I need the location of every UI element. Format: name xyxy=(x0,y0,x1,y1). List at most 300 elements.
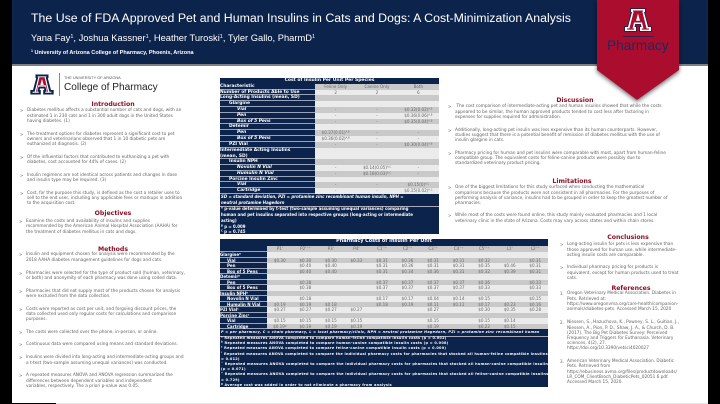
table rows: - xyxy=(418,171,419,176)
table rows: 2 xyxy=(376,90,378,95)
table rows: $0.31 xyxy=(427,263,439,268)
table rows: $0.22 xyxy=(478,324,490,329)
table rows: $0.33 xyxy=(529,280,541,285)
text: reference 3: https://ebusiness.avma.org/files/productdownloads/ xyxy=(567,370,677,374)
panel: college logo xyxy=(30,73,158,96)
title: The Use of FDA Approved Pet and Human Insulins in Cats and Dogs: A Cost-Minimization Analysis xyxy=(31,11,571,25)
table footnotes xyxy=(220,329,548,387)
table rows: $0.15(0.02)A,C xyxy=(404,188,432,193)
table rows: Cartridge xyxy=(237,188,260,193)
table rows: $0.36 xyxy=(402,263,413,268)
heading: objectives: Objectives xyxy=(95,210,131,217)
text: methods bullet 3 xyxy=(19,288,180,299)
table rows: Pen xyxy=(237,113,246,118)
text: methods bullet 8: differences between dependent variables and independent xyxy=(26,379,152,384)
table rows: Humulin N Vial xyxy=(227,302,260,307)
table rows: - xyxy=(335,165,336,170)
table rows: $0.37 xyxy=(453,285,464,290)
heading: introduction: Introduction xyxy=(91,100,135,108)
text: > xyxy=(19,219,22,224)
table rows: PZI Vial xyxy=(229,142,248,147)
text: introduction bullet 2 xyxy=(20,132,175,147)
text: introduction bullet 1: having diabetes. (1) xyxy=(27,119,70,124)
table title xyxy=(220,78,439,84)
table rows: $0.15 xyxy=(478,296,490,301)
table rows: $0.37 xyxy=(376,280,388,285)
table rows: $0.19 xyxy=(274,302,286,307)
text: discussion bullet 1: expenses for supplies required for administration. xyxy=(455,115,561,120)
table footnotes: a Repeated measures ANOVA completed to compare human-feline compatible insulin costs (p = 0.002) xyxy=(221,336,447,340)
heading: methods: Methods xyxy=(98,246,128,253)
table rows: - xyxy=(418,130,419,135)
table rows: $0.15 xyxy=(351,318,362,323)
text: methods bullet 8 xyxy=(19,372,173,389)
table rows: $0.37 xyxy=(427,280,439,285)
table rows: $0.31 xyxy=(529,269,541,274)
table rows: $0.19 xyxy=(351,324,362,329)
text: introduction bullet 2: The treatment options for diabetes represent a significant cost to pet xyxy=(27,132,175,137)
text: methods bullet 2 xyxy=(19,270,185,281)
table rows: $0.27 xyxy=(427,307,439,312)
table rows: P4* xyxy=(353,246,360,251)
text: 1. xyxy=(560,291,564,296)
text: limitations bullet 2 xyxy=(448,212,657,224)
text: limitations bullet 1 xyxy=(448,184,668,206)
table rows: Insulin NPHb xyxy=(220,291,248,296)
text: > xyxy=(448,128,451,133)
text: methods bullet 1: 2018 AAHA diabetes management guidelines for dogs and cats. xyxy=(26,258,162,263)
text: reference 3: Pets. Retrieved from xyxy=(567,364,610,369)
text: methods bullet 6: Continuous data were compared using means and standard deviations. xyxy=(26,342,178,347)
table rows: $0.19 xyxy=(325,324,337,329)
table rows: $0.15 xyxy=(325,318,337,323)
table rows: P1* xyxy=(277,246,283,251)
text: 3. xyxy=(560,359,564,364)
table rows: $0.46 xyxy=(504,263,516,268)
heading: discussion: Discussion xyxy=(556,96,594,104)
table footnotes: = 0.012) xyxy=(221,357,240,361)
text: limitations bullet 1: comparisons because the products were not consistent in all pharmacies. For the purposes of xyxy=(455,191,654,196)
university name: THE UNIVERSITY OF ARIZONA xyxy=(64,75,121,80)
table rows: Pen xyxy=(227,263,236,268)
table rows: $0.35(0.04)A,B xyxy=(404,119,432,124)
text: > xyxy=(448,185,451,190)
affiliation: 1 University of Arizona College of Pharmacy, Phoenix, Arizona xyxy=(31,49,194,56)
text: discussion bullet 1: The cost comparison of intermediate-acting pet and human insulins showed that while the costs xyxy=(456,104,662,109)
table rows: $0.19 xyxy=(427,324,439,329)
table: pharmacy costs of insulin per unit xyxy=(220,239,548,387)
table: cost of insulin per unit per species xyxy=(220,78,439,234)
panel: header band xyxy=(12,0,708,66)
text: methods bullet 8: A repeated measures ANOVA and ANOVA regression summarized the xyxy=(26,373,173,378)
table rows: $0.19g xyxy=(273,324,286,329)
text: > xyxy=(19,271,22,276)
table rows: $0.18 xyxy=(299,296,311,301)
text: discussion bullet 2: Additionally, long-acting pet insulin was less expensive than its human counterparts. However, xyxy=(455,128,657,133)
table rows: $0.32 xyxy=(478,258,490,263)
text: introduction bullet 3: diabetes, cost accounted for 44% of cases. (2) xyxy=(27,160,126,165)
table rows: - xyxy=(335,113,336,118)
table rows: $0.30 xyxy=(299,258,311,263)
text: reference 2: Frequency and Triggers for Euthanasia. Veterinary xyxy=(567,336,673,341)
table rows: Box of 5 Pens xyxy=(227,269,258,274)
table rows: Porcine Zincc xyxy=(220,313,249,318)
table rows: Box of 5 Pens xyxy=(227,285,258,290)
table rows: Pen xyxy=(237,130,246,135)
text: discussion bullet 3: compatible group. The equivalent costs for feline-canine products were possibly due to xyxy=(455,156,640,161)
table rows: $0.18 xyxy=(325,302,337,307)
text: reference 2: https://doi.org/10.3390/vetsci4020027 xyxy=(567,346,649,351)
table rows: 2 xyxy=(334,90,337,95)
table rows: Intermediate Acting Insulins xyxy=(220,148,290,153)
text: > xyxy=(448,213,451,218)
table rows: Glarginea xyxy=(220,252,241,257)
table rows: - xyxy=(335,188,336,193)
text: conclusions bullet 2: equivalent, except for human products used to treat xyxy=(567,271,678,276)
text: introduction bullet 3: Of the influential factors that contributed to euthanizing a pet with xyxy=(27,155,169,160)
text: reference 2 xyxy=(560,320,679,351)
text: reference 1 xyxy=(560,290,678,312)
table rows: C3^+ xyxy=(428,246,438,251)
text: introduction bullet 3 xyxy=(20,154,169,165)
text: conclusions bullet 2: cats. xyxy=(567,276,577,281)
table rows: $0.36(0.02)A,B xyxy=(322,136,350,141)
icon: block A logo xyxy=(30,74,54,94)
table rows: $0.35 xyxy=(478,263,490,268)
table footnotes: P = per pharmacy, C = chain pharmacy, L = local pharmacy/clinic, NPH = neutral protamine Hagedorn, PZI = protamine zinc recombinant human xyxy=(221,330,540,334)
text: > xyxy=(560,242,563,247)
table rows: Cartridge xyxy=(227,324,248,329)
text: methods bullet 7: a t-test (two-sample assuming unequal variances) was conducted. xyxy=(26,361,168,366)
text: conclusions bullet 2 xyxy=(560,264,678,281)
table rows: - xyxy=(335,107,336,112)
text: introduction bullet 1: Diabetes mellitus affects a substantial number of cats and dogs, with an xyxy=(27,108,181,113)
text: > xyxy=(19,330,22,335)
table footnotes: (p = 0.071) xyxy=(221,367,246,371)
table rows: $0.38 xyxy=(299,280,311,285)
table rows: - xyxy=(335,182,336,187)
table rows: $0.34 xyxy=(402,269,413,274)
text: > xyxy=(19,342,22,347)
table title xyxy=(220,239,548,246)
table rows: $0.28 xyxy=(529,307,541,312)
text: conclusions bullet 1 xyxy=(560,242,677,258)
table rows: $0.16 xyxy=(529,302,541,307)
table rows: $0.36(0.06)A,B xyxy=(404,113,432,118)
text: discussion bullet 3: standardized veterinary product pricing. xyxy=(455,161,541,166)
text: objectives bullet xyxy=(19,218,178,234)
table rows: Number of Products Able to Use xyxy=(220,90,300,95)
icon: block A logo xyxy=(624,8,652,32)
table rows: Vial xyxy=(227,258,235,263)
table rows: Detemir xyxy=(229,124,249,129)
college name: College of Pharmacy xyxy=(64,82,158,93)
text: discussion bullet 3 xyxy=(448,150,666,166)
text: discussion bullet 3: Pharmacy pricing for human and pet insulins were comparable with most, apart from human-feline xyxy=(455,151,666,156)
heading: conclusions: Conclusions xyxy=(607,234,649,241)
table rows: $0.31 xyxy=(453,258,464,263)
table rows: Novolin N Vial xyxy=(227,296,259,301)
table rows: $0.15 xyxy=(427,318,439,323)
table rows: $0.14(0.05)A,C xyxy=(363,165,391,170)
table rows: $0.31 xyxy=(529,263,541,268)
text: methods bullet 4: data collected used only regular costs for calculations and comparison xyxy=(26,312,176,317)
table rows: Feline Only xyxy=(324,84,347,89)
text: conclusions bullet 1: Long-acting insulin for pets is less expensive than xyxy=(567,242,673,247)
table footnotes: A p-value determined by t-test (two-sample assuming unequal variances) comparing xyxy=(221,206,408,211)
table rows: Long-Acting Insulins (mean, SD) xyxy=(220,95,300,100)
text: methods bullet 7 xyxy=(19,354,184,366)
text: > xyxy=(20,191,23,196)
table rows: - xyxy=(376,136,378,141)
text: methods bullet 2: or both) and anonymity of each pharmacy was done using coded data. xyxy=(26,276,177,281)
table rows: $0.31 xyxy=(427,258,439,263)
table rows: - xyxy=(376,119,378,124)
divider xyxy=(58,73,60,96)
table rows: - xyxy=(418,136,419,141)
text: limitations bullet 1: One of the biggest limitations for this study surfaced when conducting the mathematical xyxy=(455,185,644,190)
table rows: PZI Vialc xyxy=(220,307,239,312)
table rows: $0.15(0)A,C xyxy=(408,182,429,187)
table rows: $0.27 xyxy=(299,307,311,312)
table rows: Box of 5 Pens xyxy=(237,119,271,124)
text: introduction bullet 5 xyxy=(20,190,182,206)
text: methods bullet 1 xyxy=(19,252,175,263)
table rows: P3* xyxy=(328,246,334,251)
text: limitations bullet 2: veterinary clinic in the state of Arizona. Costs may vary across states and within chain stores. xyxy=(455,219,655,224)
divider rule xyxy=(623,35,654,37)
text: methods bullet 5: The costs were collected over the phone, in-person, or online. xyxy=(26,330,158,335)
table rows: $0.37(0.01)A,B xyxy=(322,130,350,135)
table rows: $0.15 xyxy=(274,318,286,323)
text: > xyxy=(20,108,23,113)
table rows: Vial xyxy=(227,318,235,323)
text: reference 1: Oregon Veterinary Medical Association. Diabetes in xyxy=(567,291,676,296)
table rows: Box of 5 Pens xyxy=(237,136,271,141)
table rows: $0.23 xyxy=(504,302,516,307)
table rows: $0.31 xyxy=(376,258,388,263)
table rows: $0.31 xyxy=(453,269,464,274)
table rows: $0.37 xyxy=(453,280,464,285)
table rows: $0.30 xyxy=(478,307,490,312)
text: conclusions bullet 2: Individual pharmacy pricing for products is xyxy=(567,265,658,270)
table rows: Insulin NPH xyxy=(229,159,258,164)
text: > xyxy=(19,289,22,294)
table rows: $0.38 xyxy=(299,285,311,290)
table rows: $0.33 xyxy=(351,258,362,263)
table rows: $0.30 xyxy=(325,258,337,263)
table rows: $0.04 xyxy=(427,296,439,301)
table footnotes: * Repeated measures ANOVA completed to compare the individual pharmacy costs for pharmacies that stocked all human-feline compatible insulins (p xyxy=(221,351,548,356)
table rows: $0.37 xyxy=(376,285,388,290)
text: introduction bullet 1 xyxy=(20,108,181,124)
table footnotes: SD = standard deviation, PZI = protamine zinc recombinant human insulin, NPH = xyxy=(221,194,404,199)
text: limitations bullet 2: While most of the costs were found online, this study mainly evaluated pharmacies and 1 local xyxy=(455,213,657,218)
table rows: $0.40 xyxy=(325,269,337,274)
table rows: $0.11 xyxy=(453,302,464,307)
heading: limitations: Limitations xyxy=(552,178,592,185)
text: objectives bullet: Examine the costs and availability of insulins and supplies xyxy=(26,219,150,224)
table rows: $0.27 xyxy=(325,307,337,312)
table rows: $0.15 xyxy=(478,318,490,323)
authors: Yana Fay1, Joshua Kassner1, Heather Turoski1, Tyler Gallo, PharmD1 xyxy=(31,33,315,43)
text: reference 1: Pets. Retrieved at: xyxy=(567,297,606,302)
text: introduction bullet 5: to the acquisition cost. xyxy=(27,201,76,206)
table rows: $0.15 xyxy=(504,324,516,329)
table rows: $0.19 xyxy=(299,324,311,329)
table rows: $0.30(0.04)A,B xyxy=(404,142,432,147)
table rows: P2*^+ xyxy=(300,246,310,251)
table rows: $0.27 xyxy=(351,307,362,312)
table rows: - xyxy=(335,119,336,124)
text: reference 1: animals/diabetes-pets. Accessed March 15, 2020 xyxy=(567,307,671,312)
ribbon shape xyxy=(594,0,682,104)
table rows: Glargine xyxy=(229,101,250,106)
text: discussion bullet 2: insulin glargine in cats. xyxy=(455,138,504,143)
text: introduction bullet 2: euthanized at diagnosis. (2) xyxy=(27,142,86,147)
table rows: $0.27 xyxy=(274,307,286,312)
table rows: Novolin N Vial xyxy=(237,165,272,170)
panel: pharmacy ribbon xyxy=(594,0,682,104)
table rows: C4^+ xyxy=(454,246,463,251)
table footnotes: ^ Repeated measures ANOVA completed to compare the individual pharmacy costs for pharmacies that stocked all human-canine compatible insulins xyxy=(221,362,548,366)
table rows: - xyxy=(376,113,378,118)
table footnotes xyxy=(220,194,439,234)
table rows: $0.40 xyxy=(325,263,337,268)
text: > xyxy=(19,252,22,257)
table rows: Humulin N Vial xyxy=(237,171,274,176)
text: > xyxy=(20,173,23,178)
table rows: - xyxy=(376,182,378,187)
table rows: $0.15 xyxy=(529,296,541,301)
text: limitations bullet 1: performing analysis of variance, insulins had to be grouped in order to keep the greatest number of xyxy=(455,196,668,201)
text: reference 2: (2017). The Big Pet Diabetes Survey: Perceived xyxy=(567,331,667,336)
text: limitations bullet 1: pharmacies. xyxy=(455,201,481,206)
text: reference 3: American Veterinary Medical Association. Diabetic xyxy=(567,359,674,364)
table rows: $0.37 xyxy=(427,285,439,290)
text: methods bullet 8: variables, respectively. The a priori p-value was 0.05. xyxy=(26,384,139,389)
text: reference 3: Accessed March 15, 2020. xyxy=(567,380,623,385)
table rows: $0.36 xyxy=(427,269,439,274)
table rows: Detemira xyxy=(220,274,240,279)
table footnotes: b Repeated measures ANOVA completed to compare human-canine compatible insulin costs (p = 0.008) xyxy=(221,341,449,345)
table rows: - xyxy=(376,188,378,193)
table rows: $0.36 xyxy=(402,258,413,263)
text: methods bullet 7: Insulins were divided into long-acting and intermediate-acting groups and xyxy=(26,355,184,360)
table rows: - xyxy=(335,171,336,176)
table rows: $0.40 xyxy=(299,263,311,268)
text: methods bullet 3: were excluded from the data collection. xyxy=(26,294,110,299)
text: methods bullet 3: Pharmacies that did not supply most of the products chosen for analysis xyxy=(26,289,180,294)
text: reference 3 xyxy=(560,358,677,385)
text: methods bullet 4: purposes. xyxy=(26,317,47,322)
text: reference 3: LR_COM_ClientBroch_DiabeticPets_02051 6.pdf. xyxy=(567,375,669,380)
table rows: $0.17 xyxy=(478,302,490,307)
text: introduction bullet 4 xyxy=(20,172,177,183)
table rows: Both xyxy=(414,84,423,89)
text: > xyxy=(19,373,22,378)
table rows: Vial xyxy=(237,182,246,187)
text: objectives bullet: the treatment of diabetes mellitus in cats and dogs. xyxy=(26,230,137,234)
text: > xyxy=(20,132,23,137)
text: objectives bullet: recommended by the American Animal Hospital Association (AAHA) for xyxy=(26,224,177,229)
text: discussion bullet 2 xyxy=(448,128,660,143)
text: discussion bullet 1: appeared to be similar, the human approved products tended to cost less after factoring in xyxy=(455,110,649,115)
table rows xyxy=(220,246,548,329)
text: discussion bullet 1 xyxy=(448,104,662,120)
table rows: (mean, SD) xyxy=(220,154,248,159)
table rows: - xyxy=(376,130,378,135)
table rows: $0.31 xyxy=(376,263,388,268)
table footnotes: acting) xyxy=(221,218,237,223)
table rows: $0.37 xyxy=(402,285,413,290)
table rows: L1* xyxy=(507,246,513,251)
table footnotes: + Repeated measures ANOVA completed to compare the individual pharmacy costs for pharmacies that stocked all feline-canine compatible insulins (p xyxy=(221,372,548,376)
table rows: C5*^+ xyxy=(479,246,489,251)
table rows: Pen xyxy=(227,280,236,285)
text: reference 2: sciences, 4(2), 27. xyxy=(567,341,606,346)
table rows: C2^+ xyxy=(403,246,412,251)
table rows: $0.17 xyxy=(376,296,388,301)
heading: references: References xyxy=(611,285,651,292)
text: introduction bullet 5: sell to the end user, including any applicable fees or markups in addition xyxy=(27,196,182,201)
table rows: C1^+ xyxy=(377,246,387,251)
bottom edge xyxy=(56,403,708,404)
table rows: $0.37 xyxy=(402,280,413,285)
table rows: $0.17 xyxy=(402,296,413,301)
table rows: - xyxy=(376,107,378,112)
table rows: $0.32 xyxy=(478,269,490,274)
text: > xyxy=(20,155,23,160)
text: introduction bullet 4: and insulin type may be required. (3) xyxy=(27,178,106,183)
text: 2. xyxy=(560,320,564,325)
table rows: $0.32(0.02)A,B xyxy=(404,107,432,112)
table rows: $0.35 xyxy=(504,307,516,312)
text: introduction bullet 4: Insulin regimens are not identical across patients and changes in dose xyxy=(27,173,177,178)
text: introduction bullet 5: Cost, for the purpose this study, is defined as the cost a retailer uses to xyxy=(27,191,180,196)
table rows: $0.19 xyxy=(299,302,311,307)
table rows: L2^+ xyxy=(531,246,540,251)
table rows: $0.30 xyxy=(274,258,286,263)
table rows: $0.40 xyxy=(299,269,311,274)
text: methods bullet 2: Pharmacies were selected for the type of product sold (human, veterinary, xyxy=(26,271,185,276)
table rows: Characteristic xyxy=(220,84,255,89)
table rows: $0.31 xyxy=(376,269,388,274)
table title: Cost of Insulin Per Unit Per Species xyxy=(285,78,374,82)
text: discussion bullet 2: studies suggest that there is a potential benefit of remission of diabetes mellitus with the use of xyxy=(455,133,660,138)
table rows: - xyxy=(376,142,378,147)
table rows: $0.39 xyxy=(504,269,516,274)
table footnotes: g Average cost was added in order to not eliminate a pharmacy from analysis xyxy=(221,382,392,387)
table rows: - xyxy=(335,142,336,147)
text: methods bullet 1: Insulin and equipment chosen for analysis were recommended by the xyxy=(26,252,175,257)
table rows: $0.18 xyxy=(376,302,388,307)
table rows: Canine Only xyxy=(365,84,389,89)
table rows: $0.33 xyxy=(529,285,541,290)
pharmacy label: Pharmacy xyxy=(607,38,669,53)
table rows: $0.33 xyxy=(478,285,490,290)
text: methods bullet 4: Costs were reported as cost per unit, and forgoing discount prices, the xyxy=(26,307,176,312)
text: introduction bullet 1: estimated 1 in 230 cats and 1 in 300 adult dogs in the United States xyxy=(27,114,173,119)
text: introduction bullet 2: owners and veterinarians observed that 1 in 10 diabetic pets are xyxy=(27,137,165,142)
table rows: $0.31 xyxy=(453,263,464,268)
table footnotes: B p = 0.009 xyxy=(221,224,246,229)
text: > xyxy=(448,151,451,156)
table rows: Vial xyxy=(237,107,246,112)
text: reference 2: Niessen, S., Hazuchova, K., Powney, S. L., Guitian, J., xyxy=(567,320,679,325)
table rows: $0.14 xyxy=(504,318,516,323)
table rows: - xyxy=(418,165,419,170)
